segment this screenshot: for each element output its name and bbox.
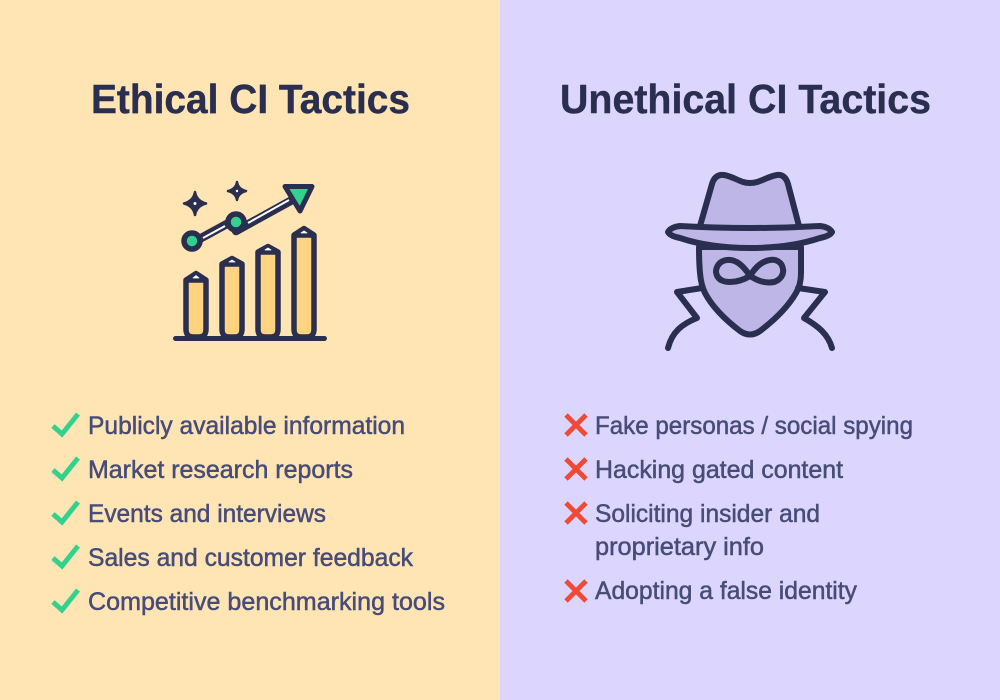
list: unethical tactics: Adopting a false identity (595, 577, 857, 605)
list: ethical tactics (88, 412, 445, 616)
list: unethical tactics (595, 412, 913, 605)
list: ethical tactics: Competitive benchmarking tools (88, 588, 445, 616)
list: ethical tactics: Publicly available information (88, 412, 405, 440)
list: unethical tactics: Hacking gated content (595, 456, 843, 484)
list: ethical tactics: Sales and customer feedback (88, 544, 413, 572)
heading: unethical CI tactics: Unethical CI Tactics (560, 76, 931, 122)
icon: check marks (53, 414, 78, 610)
list: ethical tactics: Events and interviews (88, 500, 326, 528)
panel: ethical tactics (0, 0, 500, 700)
list: unethical tactics: proprietary info (595, 533, 764, 561)
list: unethical tactics: Soliciting insider and (595, 500, 820, 528)
icon: spy with hat and mask (668, 175, 832, 348)
icon: cross marks (566, 415, 586, 601)
heading: ethical CI tactics: Ethical CI Tactics (91, 76, 410, 122)
panel: unethical tactics (500, 0, 1000, 700)
list: unethical tactics: Fake personas / social spying (595, 412, 913, 440)
list: ethical tactics: Market research reports (88, 456, 353, 484)
icon: rising bar chart with arrow (176, 182, 324, 338)
